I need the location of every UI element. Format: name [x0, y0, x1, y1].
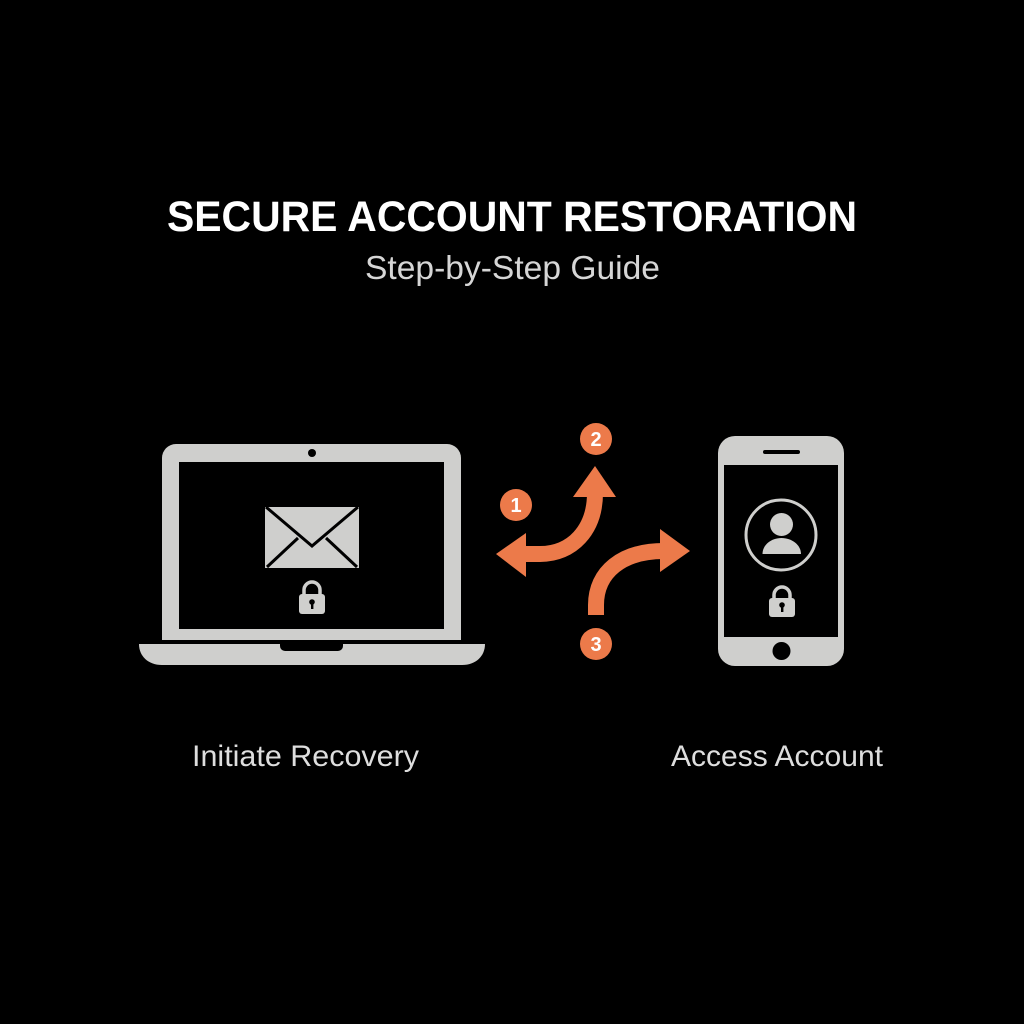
laptop notch — [280, 644, 343, 651]
title: SECURE ACCOUNT RESTORATION — [167, 193, 857, 241]
arrow: step 3 curve — [596, 529, 690, 615]
icon: smartphone with profile and lock — [718, 436, 844, 666]
step badge 2: 2 — [590, 429, 602, 451]
arrow: steps 1 and 2 double-headed curve — [496, 466, 616, 577]
icon: envelope — [265, 507, 359, 568]
step badge 1 — [500, 489, 532, 521]
phone body — [718, 436, 844, 666]
icon: profile — [746, 500, 816, 570]
phone screen — [724, 465, 838, 637]
step badge 3: 3 — [590, 634, 602, 656]
step badge 2 — [580, 423, 612, 455]
webcam — [308, 449, 316, 457]
icon: laptop lock — [299, 582, 325, 614]
icon: laptop with email and lock — [139, 444, 485, 665]
phone home button — [772, 642, 790, 660]
phone speaker — [763, 450, 800, 454]
laptop base — [139, 644, 485, 665]
step badge 3 — [580, 628, 612, 660]
step badge 1: 1 — [510, 495, 522, 517]
label: initiate recovery: Initiate Recovery — [192, 740, 419, 773]
label: access account: Access Account — [671, 740, 884, 773]
laptop screen — [179, 462, 444, 629]
subtitle: Step-by-Step Guide — [365, 249, 660, 286]
laptop lid — [162, 444, 461, 640]
icon: phone lock — [769, 587, 795, 617]
